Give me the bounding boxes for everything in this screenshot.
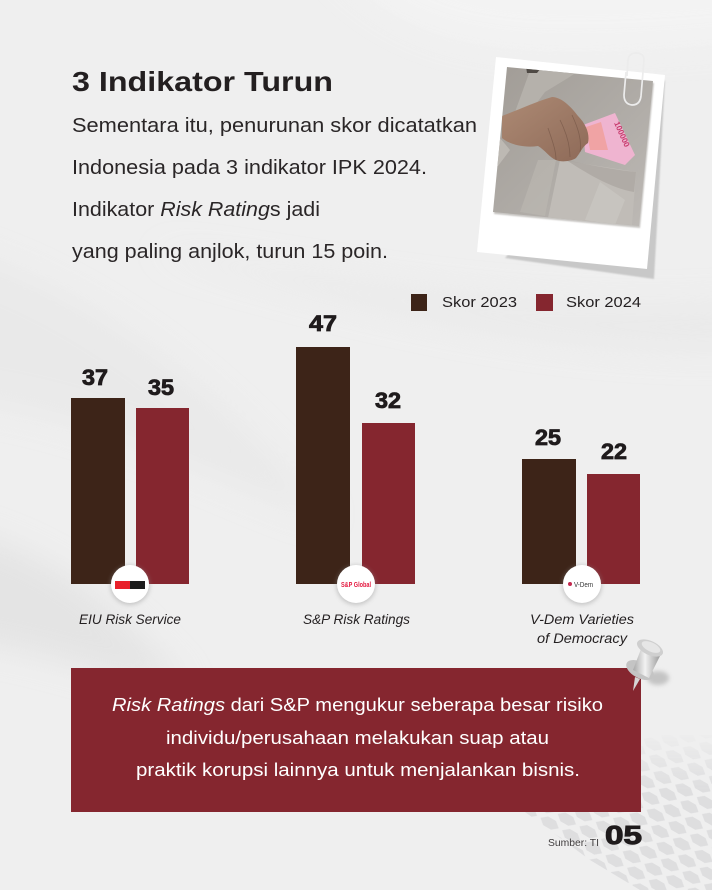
polaroid photo: [477, 53, 665, 279]
legend: [411, 294, 641, 311]
group: EIU Risk Service: 37: [82, 365, 108, 390]
group: EIU Risk Service: 35: [148, 375, 174, 400]
logo: V-Dem: V-Dem: [574, 582, 593, 589]
legend: Skor 2024: Skor 2024: [566, 294, 641, 311]
intro text block: Sementara itu, penurunan skor dicatatkan: [72, 115, 477, 137]
callout box: individu/perusahaan melakukan suap atau: [166, 728, 549, 748]
logo: V-Dem: [562, 565, 602, 605]
callout box: Risk Ratings dari S&P mengukur seberapa besar risiko: [112, 695, 603, 715]
group: S&P Risk Ratings: 47: [309, 311, 337, 336]
photo: hand and money in shirt pocket: [493, 67, 653, 226]
group: EIU Risk Service: [71, 365, 189, 627]
callout box: praktik korupsi lainnya untuk menjalankan bisnis.: [136, 760, 580, 780]
group: V-Dem Varieties of Democracy: [522, 425, 640, 646]
hand: [502, 97, 589, 161]
group: V-Dem Varieties of Democracy: V-Dem Varieties: [530, 612, 634, 627]
group: S&P Risk Ratings: [296, 311, 415, 627]
group: V-Dem Varieties of Democracy: 25: [535, 425, 561, 450]
page number: 05: [605, 820, 642, 850]
legend: Skor 2023: [411, 294, 517, 311]
group: V-Dem Varieties of Democracy: of Democracy: [537, 631, 628, 646]
background texture: [0, 558, 712, 890]
legend: Skor 2024: [536, 294, 641, 311]
logo: S&P Global: S&P Global: [341, 582, 371, 589]
intro text block: [72, 115, 477, 263]
icon: push pin: [623, 636, 669, 691]
group: EIU Risk Service: EIU Risk Service: [79, 612, 181, 627]
title: 3 Indikator Turun: [72, 66, 333, 97]
intro text block: Indonesia pada 3 indikator IPK 2024.: [72, 157, 427, 179]
banknotes: [583, 113, 635, 165]
logo: EIU: [110, 565, 150, 605]
group: V-Dem Varieties of Democracy: 22: [601, 439, 627, 464]
source note: Sumber: TI: [548, 837, 599, 849]
intro text block: yang paling anjlok, turun 15 poin.: [72, 241, 388, 263]
legend: Skor 2023: Skor 2023: [442, 294, 517, 311]
logo: S&P Global: [336, 565, 376, 605]
group: S&P Risk Ratings: S&P Risk Ratings: [303, 612, 410, 627]
bar chart: [71, 311, 640, 646]
intro text block: Indikator Risk Rating s jadi: [72, 199, 320, 221]
paperclip: [624, 53, 644, 105]
group: S&P Risk Ratings: 32: [375, 388, 401, 413]
callout box: [71, 668, 641, 812]
photo: hand and money in shirt pocket: 100000: [612, 120, 632, 149]
